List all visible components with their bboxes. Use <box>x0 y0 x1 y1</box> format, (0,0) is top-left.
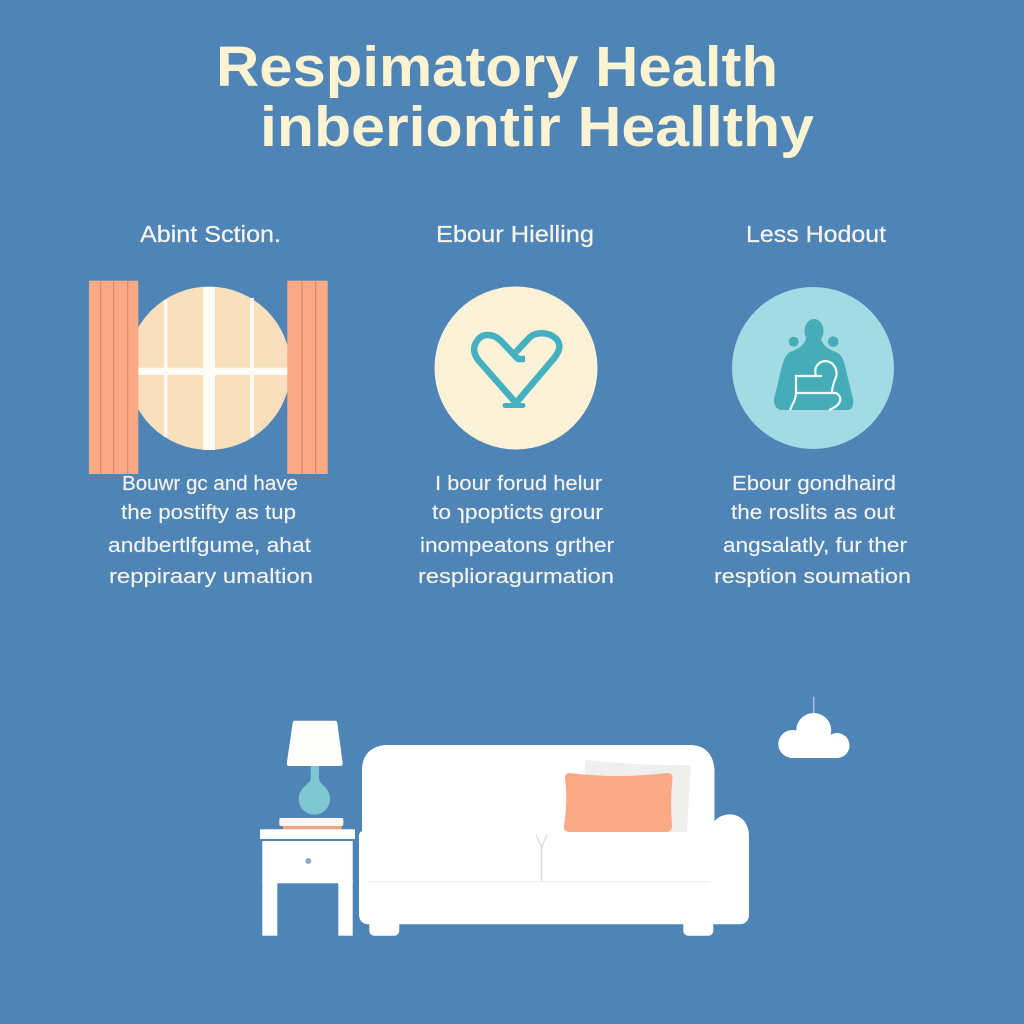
icon: table lamp <box>287 721 343 815</box>
icon: window with curtains <box>89 281 328 474</box>
text block: column 2: resplioragurmation <box>418 565 614 588</box>
heading: column 2: Ebour Hielling <box>436 221 594 247</box>
text block: column 1: reppiraary umaltion <box>109 565 313 588</box>
heading: column 1: Abint Sction. <box>140 221 281 247</box>
icon: cloud <box>778 697 850 758</box>
text block: column 1: andbertlfgume, ahat <box>108 534 311 557</box>
title: inberiontir Heallthy <box>260 95 814 159</box>
text block: column 1 <box>108 472 313 588</box>
title: Respimatory Health <box>216 35 778 99</box>
text block: column 1: the postifty as tup <box>121 501 296 524</box>
text block: column 3: angsalatly, fur ther <box>723 534 907 557</box>
text block: column 3: resption soumation <box>714 565 911 588</box>
icon: person in circle <box>732 287 894 449</box>
icon: nightstand <box>260 829 355 936</box>
icon: books <box>279 818 343 830</box>
text block: column 1: Bouwr gc and have <box>122 472 298 495</box>
text block: column 2: inompeatons grther <box>420 534 614 557</box>
text block: column 3: the roslits as out <box>731 501 895 524</box>
text block: column 2: to ɿpopticts grour <box>432 501 603 524</box>
text block: column 2: I bour forud helur <box>435 472 602 495</box>
title <box>216 35 814 159</box>
text block: column 3: Ebour gondhaird <box>732 472 896 495</box>
icon: sofa <box>359 745 749 936</box>
text block: column 3 <box>714 472 911 588</box>
icon: heart in circle <box>434 286 598 450</box>
heading: column 3: Less Hodout <box>746 221 887 247</box>
text block: column 2 <box>418 472 614 588</box>
